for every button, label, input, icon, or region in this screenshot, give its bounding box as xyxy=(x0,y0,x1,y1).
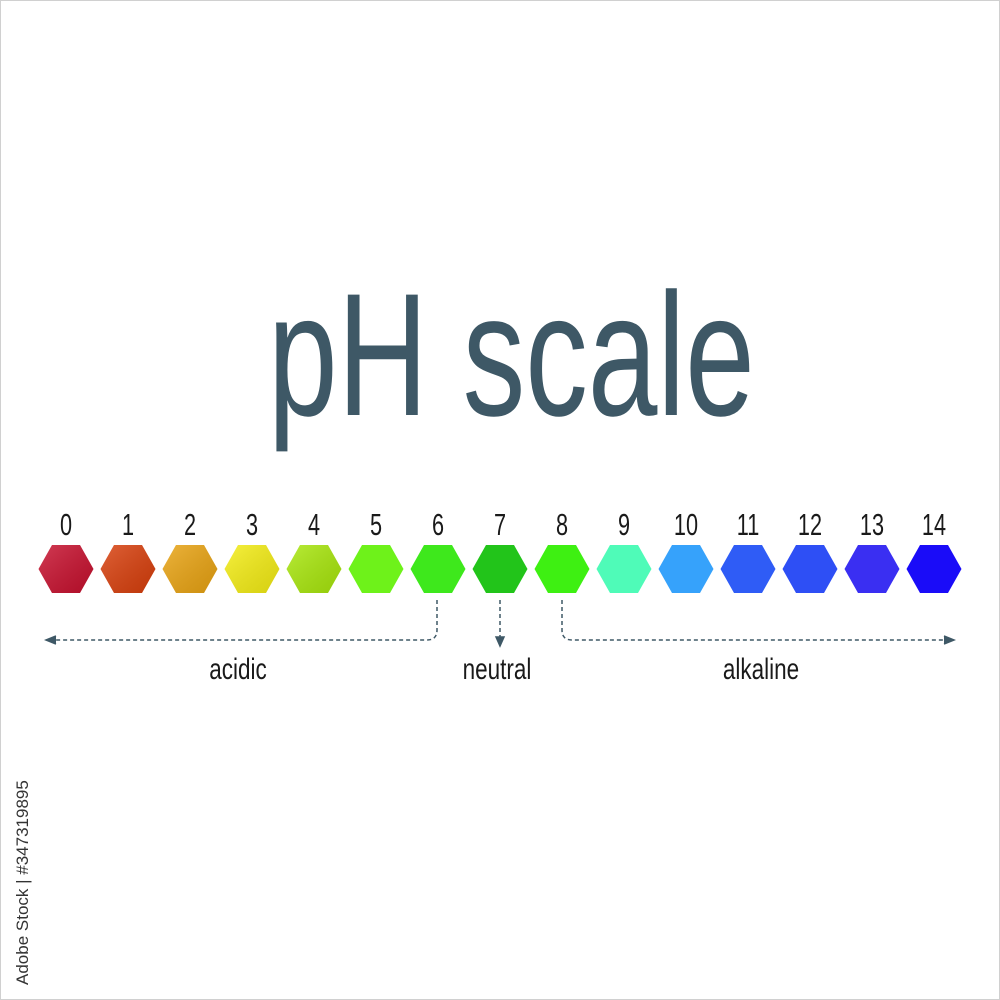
scale numbers: 7 xyxy=(494,507,506,542)
scale numbers: 8 xyxy=(556,507,568,542)
arrow: alkaline xyxy=(562,600,954,644)
scale numbers: 3 xyxy=(246,507,258,542)
scale numbers: 12 xyxy=(798,507,822,542)
scale numbers xyxy=(60,507,946,542)
scale numbers: 14 xyxy=(922,507,946,542)
scale numbers: 1 xyxy=(122,507,134,542)
scale numbers: 0 xyxy=(60,507,72,542)
labels xyxy=(209,652,799,686)
hexagon scale xyxy=(38,545,962,593)
scale numbers: 2 xyxy=(184,507,196,542)
scale numbers: 6 xyxy=(432,507,444,542)
scale numbers: 11 xyxy=(737,507,759,542)
arrow: acidic xyxy=(46,600,437,644)
watermark id: Adobe Stock | #347319895 xyxy=(13,780,32,985)
scale numbers: 10 xyxy=(674,507,698,542)
scale numbers: 5 xyxy=(370,507,382,542)
scale numbers: 4 xyxy=(308,507,320,542)
labels: neutral xyxy=(463,652,531,686)
labels: acidic xyxy=(209,652,267,686)
title: pH scale xyxy=(268,257,755,453)
labels: alkaline xyxy=(723,652,799,686)
arrow: neutral xyxy=(496,600,504,646)
scale numbers: 13 xyxy=(860,507,884,542)
scale numbers: 9 xyxy=(618,507,630,542)
